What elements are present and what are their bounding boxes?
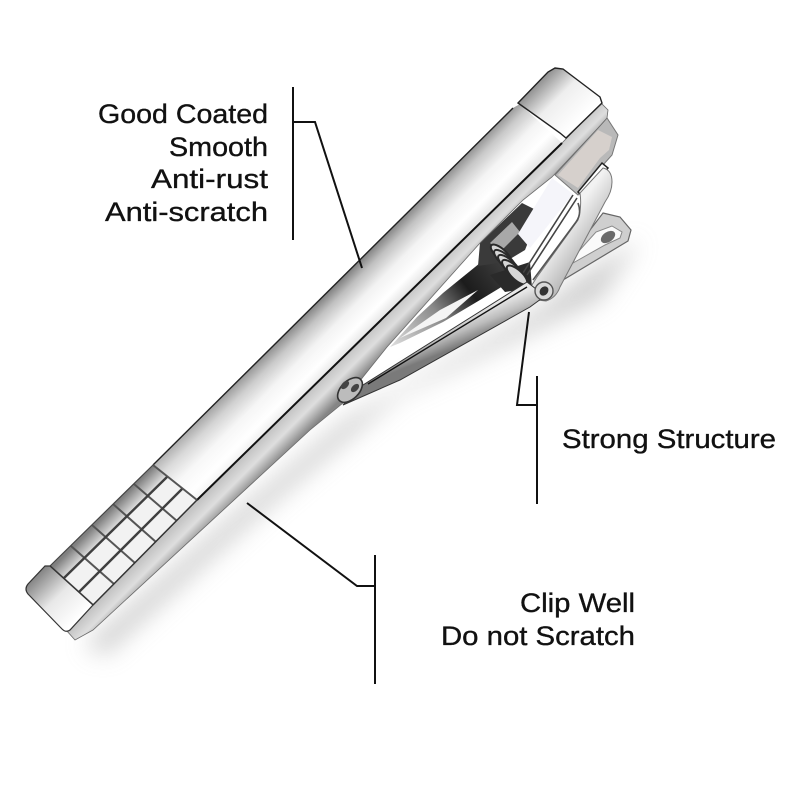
text block: coating features: Anti-scratch [105, 197, 268, 227]
soft shadow [85, 240, 640, 655]
text block: coating features [98, 99, 269, 227]
text block: clip well [441, 588, 635, 651]
callout line: structure [517, 312, 537, 504]
text block: strong structure: Strong Structure [562, 424, 776, 454]
callout line: coating [293, 87, 362, 268]
silver back plate with engraved window [555, 118, 618, 198]
top cap [518, 68, 602, 138]
clip lever [518, 168, 612, 301]
rivet: lever hinge [535, 282, 553, 300]
rivet: front hinge [333, 373, 367, 407]
end cap [26, 566, 93, 631]
text block: coating features: Smooth [169, 132, 268, 162]
text block: clip well: Clip Well [520, 588, 635, 618]
textured grip [50, 465, 197, 605]
side strip [66, 103, 608, 640]
text block: clip well: Do not Scratch [441, 621, 635, 651]
text block: coating features: Anti-rust [151, 164, 269, 194]
callout line: clip [247, 503, 375, 684]
back clip arm [556, 213, 631, 280]
spring [488, 242, 530, 287]
text block: coating features: Good Coated [98, 99, 268, 129]
inner mechanism [390, 203, 540, 347]
main bar face [153, 104, 562, 500]
lower arm with rivets [343, 282, 553, 405]
